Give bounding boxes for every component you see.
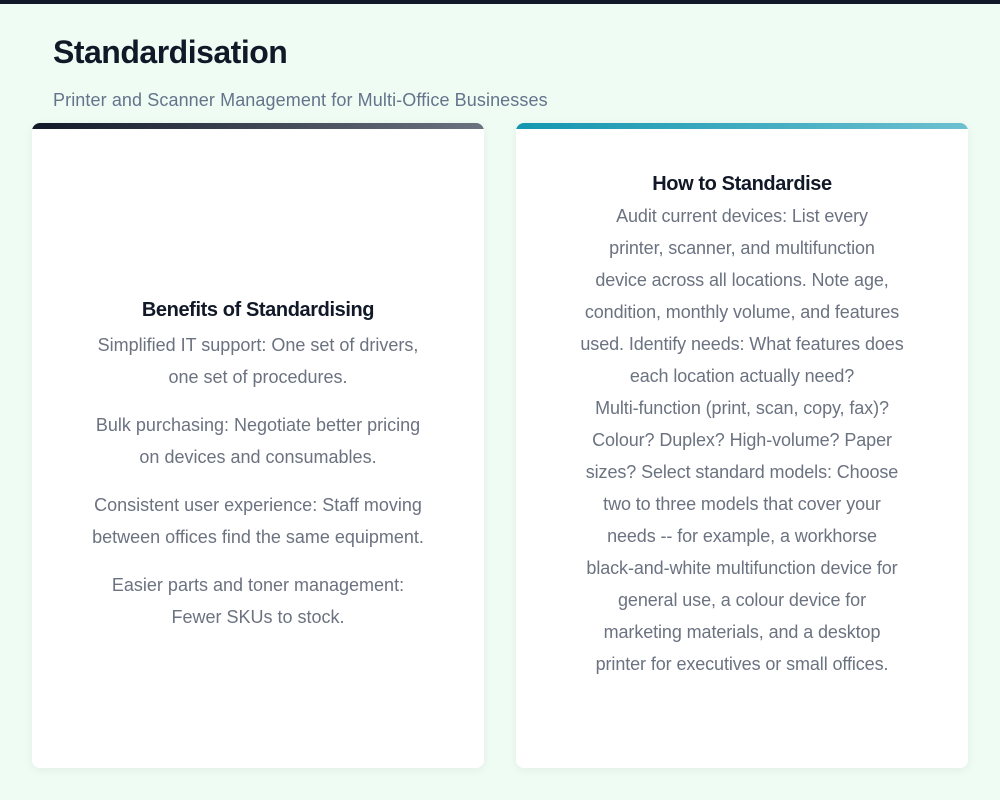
- text: steps: Colour? Duplex? High-volume? Paper: [592, 430, 892, 450]
- text: steps: sizes? Select standard models: Choose: [586, 462, 898, 482]
- text: benefits list: [92, 335, 424, 627]
- text: steps: black-and-white multifunction device for: [586, 558, 898, 578]
- text: benefits list: Consistent user experience: Staff moving: [94, 495, 422, 515]
- text: steps: Multi-function (print, scan, copy, fax)?: [595, 398, 889, 418]
- heading: how to: How to Standardise: [652, 173, 832, 195]
- subtitle: Printer and Scanner Management for Multi-Office Businesses: [53, 90, 548, 110]
- text: steps: general use, a colour device for: [618, 590, 866, 610]
- text: steps: condition, monthly volume, and features: [585, 302, 899, 322]
- title: Standardisation: [53, 34, 287, 70]
- text: steps: each location actually need?: [630, 366, 854, 386]
- text: steps: printer, scanner, and multifunction: [609, 238, 875, 258]
- text: steps: used. Identify needs: What features does: [580, 334, 904, 354]
- text: steps: [580, 206, 904, 674]
- text: steps: device across all locations. Note age,: [595, 270, 889, 290]
- heading: benefits: Benefits of Standardising: [142, 299, 374, 321]
- text: steps: marketing materials, and a desktop: [604, 622, 880, 642]
- text: benefits list: one set of procedures.: [168, 367, 348, 387]
- text: benefits list: Fewer SKUs to stock.: [171, 607, 345, 627]
- panel: how to standardise: [516, 123, 968, 768]
- text: benefits list: between offices find the same equipment.: [92, 527, 424, 547]
- text: benefits list: Simplified IT support: One set of drivers,: [98, 335, 418, 355]
- text: steps: needs -- for example, a workhorse: [607, 526, 877, 546]
- text: benefits list: Easier parts and toner management:: [112, 575, 404, 595]
- text: steps: two to three models that cover your: [603, 494, 881, 514]
- text: steps: Audit current devices: List every: [616, 206, 868, 226]
- panel: benefits: [32, 123, 484, 768]
- text: benefits list: on devices and consumables.: [139, 447, 377, 467]
- text: benefits list: Bulk purchasing: Negotiate better pricing: [96, 415, 420, 435]
- text: steps: printer for executives or small offices.: [596, 654, 888, 674]
